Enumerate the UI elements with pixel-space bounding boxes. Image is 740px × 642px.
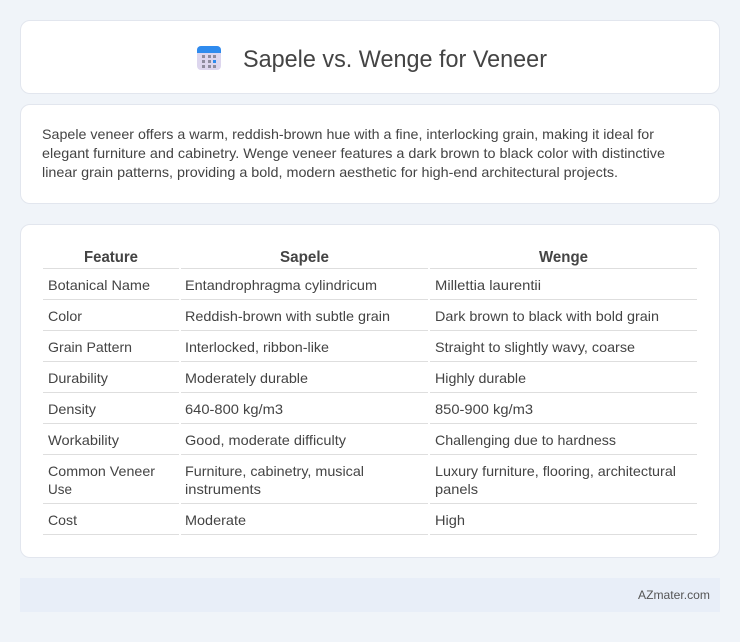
- row: botanical name: Botanical Name: [48, 277, 150, 293]
- row: common veneer use: Furniture, cabinetry, musical: [185, 463, 364, 479]
- row: density: [48, 401, 533, 417]
- row: workability: Challenging due to hardness: [435, 432, 616, 448]
- footer credit: AZmater.com: [638, 588, 710, 602]
- row: botanical name: Entandrophragma cylindricum: [185, 277, 377, 293]
- row: cost: Moderate: [185, 512, 246, 528]
- row: common veneer use: [48, 463, 676, 497]
- row: color: [48, 308, 659, 324]
- row: density: 850-900 kg/m3: [435, 401, 533, 417]
- row: durability: [48, 370, 526, 386]
- description text: Sapele veneer offers a warm, reddish-brown hue with a fine, interlocking grain, making it ideal for: [42, 126, 654, 142]
- row: cost: Cost: [48, 512, 77, 528]
- panel: footer bar: [20, 578, 720, 612]
- row: botanical name: [48, 277, 541, 293]
- row: color: Dark brown to black with bold grain: [435, 308, 659, 324]
- row: grain pattern: Straight to slightly wavy, coarse: [435, 339, 635, 355]
- table header: Sapele: [280, 249, 329, 266]
- comparison table: [43, 249, 697, 535]
- row: grain pattern: Interlocked, ribbon-like: [185, 339, 329, 355]
- row: durability: Highly durable: [435, 370, 526, 386]
- row: cost: [48, 512, 465, 528]
- row: cost: High: [435, 512, 465, 528]
- panel: title card: [20, 20, 720, 94]
- table header: [84, 249, 588, 266]
- description text: [42, 126, 665, 180]
- table header: Feature: [84, 249, 138, 266]
- description text: linear grain patterns, providing a bold, modern aesthetic for high-end architectural projects.: [42, 164, 618, 180]
- description text: elegant furniture and cabinetry. Wenge veneer features a dark brown to black color with distinctive: [42, 145, 665, 161]
- table header: Wenge: [539, 249, 588, 266]
- table rules: [43, 268, 697, 535]
- icon: calendar: [197, 46, 221, 70]
- row: grain pattern: Grain Pattern: [48, 339, 132, 355]
- row: common veneer use: Common Veneer: [48, 463, 155, 479]
- panel: table card: [20, 224, 720, 558]
- row: durability: Moderately durable: [185, 370, 308, 386]
- row: workability: Good, moderate difficulty: [185, 432, 346, 448]
- row: workability: Workability: [48, 432, 119, 448]
- row: workability: [48, 432, 616, 448]
- row: common veneer use: Use: [48, 481, 72, 497]
- row: color: Color: [48, 308, 82, 324]
- row: color: Reddish-brown with subtle grain: [185, 308, 390, 324]
- row: common veneer use: instruments: [185, 481, 261, 497]
- row: durability: Durability: [48, 370, 108, 386]
- title: Sapele vs. Wenge for Veneer: [243, 46, 547, 73]
- row: grain pattern: [48, 339, 635, 355]
- row: common veneer use: panels: [435, 481, 478, 497]
- row: botanical name: Millettia laurentii: [435, 277, 541, 293]
- row: common veneer use: Luxury furniture, flooring, architectural: [435, 463, 676, 479]
- row: density: 640-800 kg/m3: [185, 401, 283, 417]
- row: density: Density: [48, 401, 96, 417]
- panel: description card: [20, 104, 720, 204]
